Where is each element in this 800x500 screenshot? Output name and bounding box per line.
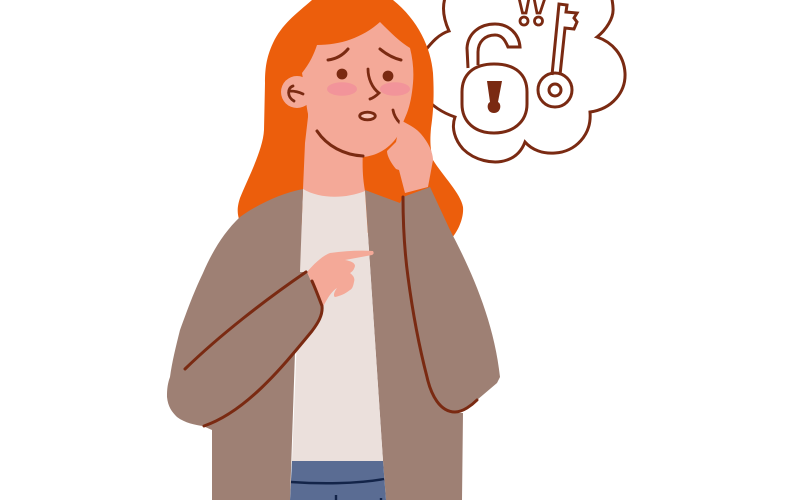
neck [303,105,365,197]
cardigan back and right panel [365,187,500,500]
pointing hand [307,251,374,307]
cheek crease [393,110,400,123]
bubble outline [424,0,625,162]
thought bubble [424,0,625,162]
cheeks [327,82,357,96]
chin hand [387,120,433,193]
left sleeve outline [185,272,322,426]
eyebrows [328,49,401,60]
right sleeve outline [403,197,477,412]
cardigan left panel and sleeve [167,189,322,500]
icon: exclamation marks [519,0,545,25]
icon: key [538,4,577,107]
facial features [289,49,410,156]
jaw line [317,131,363,156]
hair [238,0,463,240]
ear [281,76,313,108]
shirt [292,189,383,461]
face [302,22,413,157]
nose [368,69,379,99]
eyes [337,69,347,79]
icon: open padlock [462,24,527,133]
ear detail [289,86,303,101]
mouth [360,112,375,120]
jeans [290,461,386,500]
